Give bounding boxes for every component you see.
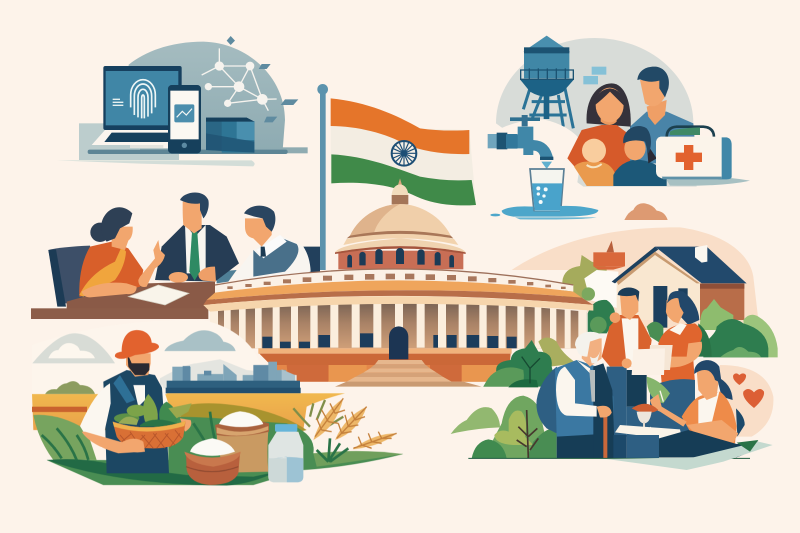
roof bands	[203, 280, 593, 312]
artwork	[31, 36, 778, 486]
bush behind table	[647, 377, 670, 403]
flagpole	[317, 84, 328, 270]
bushes at building end	[582, 287, 615, 333]
water tap	[488, 115, 553, 169]
icon: red cross	[676, 145, 702, 170]
chair left side	[48, 249, 66, 307]
flag of India	[331, 98, 476, 205]
milk bottle	[268, 424, 303, 482]
child	[574, 139, 615, 186]
data fragments	[227, 36, 298, 122]
attic storey	[215, 269, 573, 293]
man in suit	[155, 192, 239, 283]
table top	[67, 282, 215, 310]
table front	[31, 308, 208, 319]
grain sack	[215, 411, 269, 473]
woman with paper	[650, 291, 702, 437]
icon: small heart	[733, 373, 746, 385]
smartphone	[168, 85, 201, 153]
seated woman	[650, 360, 745, 443]
girl	[613, 126, 667, 186]
ashoka chakra	[392, 141, 416, 166]
panel: housing backdrop	[512, 227, 758, 333]
white wall	[584, 270, 618, 308]
water puddle	[490, 206, 598, 219]
first aid kit	[656, 127, 732, 179]
panel: meeting	[31, 192, 320, 319]
entrance steps	[335, 360, 482, 387]
icon: fingerprint	[131, 80, 155, 118]
protest sign	[593, 241, 625, 270]
dome	[343, 178, 458, 245]
city skyline	[166, 362, 301, 393]
clay bowl of rice	[184, 438, 241, 485]
panel: water and family health	[488, 36, 750, 220]
chair left	[48, 246, 100, 303]
olive bush	[562, 255, 607, 298]
backdrop dome	[57, 42, 308, 166]
glass of water	[530, 169, 564, 212]
house	[612, 245, 747, 328]
garden bushes right	[647, 299, 778, 357]
terracotta mound	[624, 203, 668, 220]
basket of leaves	[113, 394, 192, 452]
panel: community and housing	[451, 245, 778, 470]
pastry and goblet	[632, 404, 658, 430]
icon: large heart	[743, 389, 764, 408]
document	[128, 285, 189, 305]
distant bush	[45, 381, 95, 394]
man in vest	[217, 206, 311, 283]
panel: farming and food	[32, 320, 403, 486]
heart backdrop	[720, 365, 773, 437]
laptop	[92, 66, 182, 148]
cream hill behind tap	[490, 119, 583, 187]
woman	[567, 83, 631, 177]
water tower	[520, 36, 574, 128]
elderly man with cane	[536, 332, 614, 458]
woman in sari	[79, 207, 165, 297]
cream hill	[32, 320, 265, 395]
peach backdrop	[512, 227, 758, 330]
network graph	[202, 48, 277, 111]
man in orange jacket	[602, 288, 652, 437]
table	[613, 425, 758, 458]
distant haze	[160, 359, 297, 388]
chair right	[303, 247, 320, 273]
panel: digital technology	[57, 36, 308, 166]
shrubs beside parliament	[483, 337, 577, 387]
wheat field	[32, 393, 345, 435]
farmer	[80, 330, 191, 473]
colonnade	[210, 302, 587, 348]
floating bricks	[583, 67, 606, 84]
drum	[335, 238, 466, 269]
father	[630, 67, 697, 163]
ground line and shadow	[468, 440, 773, 470]
entrance door	[389, 326, 408, 359]
plinth	[258, 348, 512, 382]
left cloud mound	[32, 333, 115, 363]
green meadow	[33, 412, 403, 486]
foreground trees	[451, 396, 557, 458]
panel: parliament building	[203, 178, 593, 387]
ground shadow	[667, 177, 750, 186]
papers	[632, 345, 673, 375]
right cloud	[164, 330, 236, 351]
server block	[206, 118, 254, 153]
backdrop dome	[496, 38, 697, 187]
wheat stalks	[293, 398, 397, 462]
